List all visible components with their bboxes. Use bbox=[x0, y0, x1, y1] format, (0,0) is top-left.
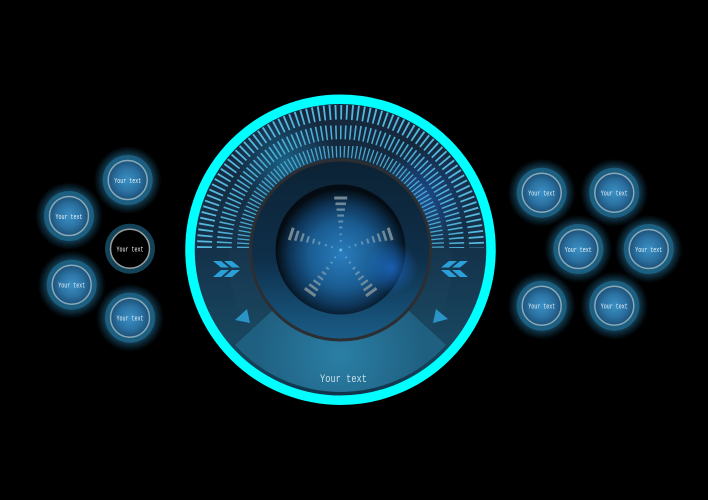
button 5: Your text bbox=[116, 316, 144, 324]
arrow: right chevrons bbox=[441, 261, 468, 277]
button 7: Your text bbox=[601, 191, 628, 199]
button 10 bbox=[508, 272, 576, 340]
arrow: left chevrons bbox=[213, 261, 240, 277]
inner tick band bbox=[244, 151, 438, 248]
dark inner ring bbox=[250, 160, 430, 340]
radar spokes bbox=[288, 196, 394, 297]
button 2 bbox=[35, 182, 103, 250]
button 8 bbox=[544, 215, 612, 283]
sphere bbox=[276, 184, 406, 314]
left button cluster bbox=[35, 146, 164, 352]
button 11 bbox=[580, 272, 648, 340]
dial background disc bbox=[194, 103, 488, 397]
button 6 bbox=[508, 159, 576, 227]
button 8: Your text bbox=[565, 247, 592, 255]
button 3: active black bbox=[105, 224, 155, 274]
button 11: Your text bbox=[601, 304, 628, 312]
sphere highlight bbox=[366, 242, 418, 294]
tick glow left bbox=[240, 117, 330, 200]
outer tick band bbox=[204, 112, 476, 248]
button 3: active black: Your text bbox=[116, 247, 144, 255]
spoke lower left bbox=[304, 253, 341, 297]
main label: Your text bbox=[320, 374, 367, 386]
right button cluster bbox=[508, 159, 683, 340]
button 1 bbox=[94, 146, 162, 214]
button 7 bbox=[580, 159, 648, 227]
arrow: right triangle bbox=[433, 309, 448, 323]
spoke centre dot bbox=[339, 248, 342, 252]
button 4 bbox=[38, 251, 106, 319]
button 5 bbox=[96, 284, 164, 352]
tick glow right bbox=[387, 153, 466, 241]
spoke upper right bbox=[347, 227, 394, 254]
button 10: Your text bbox=[528, 304, 555, 312]
spoke lower right bbox=[340, 253, 377, 297]
middle tick band bbox=[224, 132, 457, 248]
cyan outer ring bbox=[190, 99, 491, 400]
button 2: Your text bbox=[56, 214, 82, 222]
spoke up bbox=[334, 196, 347, 242]
main dial bbox=[190, 99, 491, 400]
faint lower circle bbox=[228, 150, 452, 374]
button 9 bbox=[615, 215, 683, 283]
bottom label panel bbox=[235, 311, 446, 392]
button 1: Your text bbox=[114, 178, 141, 186]
button 9: Your text bbox=[635, 247, 662, 255]
button 4: Your text bbox=[58, 283, 85, 291]
button 6: Your text bbox=[528, 191, 555, 199]
arrow: left triangle bbox=[235, 309, 250, 323]
spoke upper left bbox=[288, 227, 335, 254]
